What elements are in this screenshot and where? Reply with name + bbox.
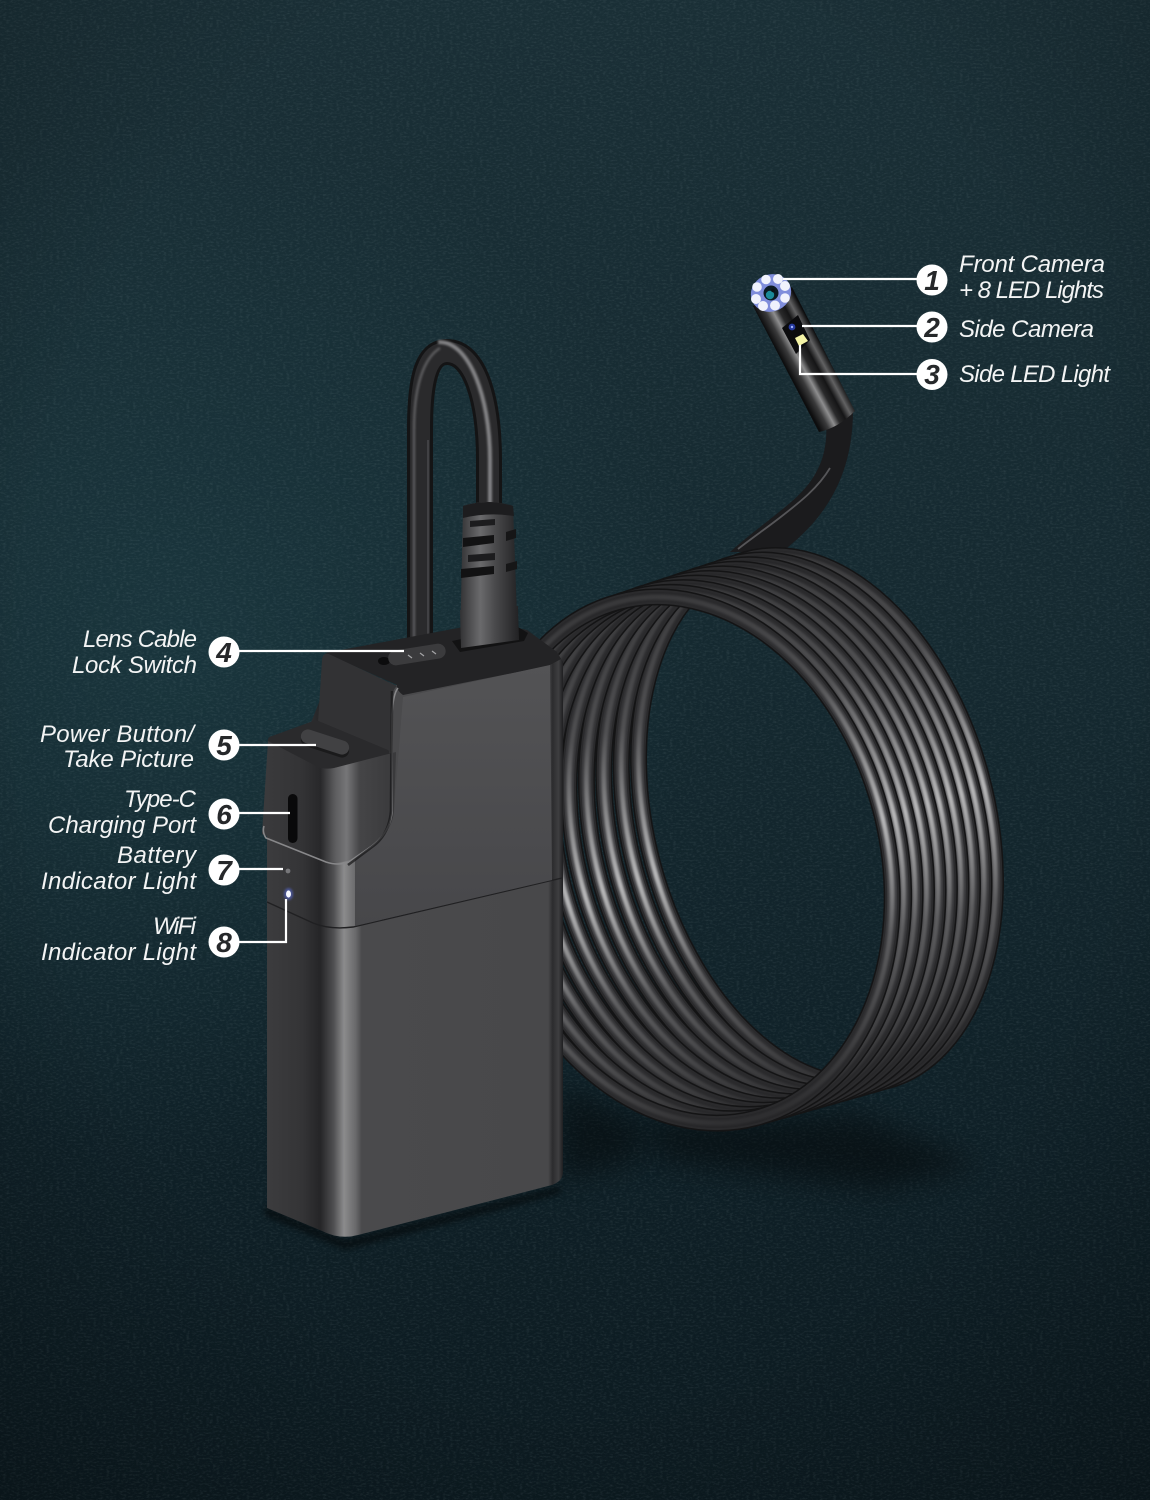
callout 8: WiFi indicator: 8 [216, 927, 232, 958]
upper step left face [318, 654, 397, 752]
icon: power button [299, 728, 351, 759]
front panel [355, 665, 552, 926]
callout 2: side camera: 2 [923, 312, 940, 343]
front camera face with 8 LEDs [745, 268, 797, 318]
icon: battery indicator light [286, 869, 290, 873]
callout 1: front camera: + 8 LED Lights [959, 277, 1104, 304]
strain relief collar [460, 502, 518, 648]
callout 1: front camera: Front Camera [959, 251, 1105, 278]
callout 8: WiFi indicator: WiFi [153, 913, 197, 940]
cable socket on top of case [452, 627, 528, 652]
callout 3: side LED light: Side LED Light [959, 361, 1111, 388]
callout 7: battery indicator: Battery [117, 842, 198, 869]
callout 6: charging port: Charging Port [48, 812, 197, 839]
callout 7: battery indicator: 7 [216, 855, 233, 886]
callout 8: WiFi indicator [41, 899, 286, 966]
callout 4: lens cable lock switch: Lock Switch [72, 652, 197, 679]
callout 4: lens cable lock switch: 4 [215, 637, 232, 668]
camera probe head [745, 268, 855, 432]
handheld WiFi case [262, 606, 563, 1237]
case body [267, 652, 563, 1237]
callout 5: power button [40, 721, 316, 773]
callout 5: power button: 5 [216, 730, 232, 761]
callout 1: front camera [783, 251, 1105, 304]
loop cable [414, 342, 490, 645]
callout 7: battery indicator: Indicator Light [41, 868, 197, 895]
cable rising to camera head [730, 410, 853, 552]
icon: lens cable lock switch [378, 643, 447, 666]
callout 2: side camera [802, 312, 1094, 343]
callout 8: WiFi indicator: Indicator Light [41, 939, 197, 966]
callout 6: charging port [48, 786, 290, 839]
callout 6: charging port: 6 [216, 799, 232, 830]
callout 2: side camera: Side Camera [959, 316, 1094, 343]
strain relief base [460, 606, 519, 648]
icon: WiFi indicator light [284, 888, 293, 900]
rear loop cable with strain relief [414, 342, 518, 648]
coiled semi-rigid cable [425, 410, 1051, 1170]
power ledge [268, 720, 390, 769]
top surface [325, 622, 561, 695]
callout 3: side LED light: 3 [924, 359, 940, 390]
side camera and LED module [782, 315, 810, 354]
callout 3: side LED light [800, 345, 1111, 390]
callout 5: power button: Take Picture [63, 746, 194, 773]
callout 1: front camera: 1 [924, 265, 940, 296]
callout 4: lens cable lock switch: Lens Cable [83, 626, 197, 653]
callout 6: charging port: Type-C [124, 786, 197, 813]
lower block with charging port [262, 741, 396, 862]
coil turns, back to front [425, 515, 1051, 1170]
icon: USB type-C port [288, 794, 298, 843]
lower seam [267, 878, 562, 928]
callout 5: power button: Power Button/ [40, 721, 196, 748]
callout 7: battery indicator [41, 842, 283, 895]
silver contour edge [263, 688, 398, 864]
callout 4: lens cable lock switch [72, 626, 404, 679]
shadow under coil and case [265, 1085, 980, 1250]
probe barrel [753, 287, 855, 432]
